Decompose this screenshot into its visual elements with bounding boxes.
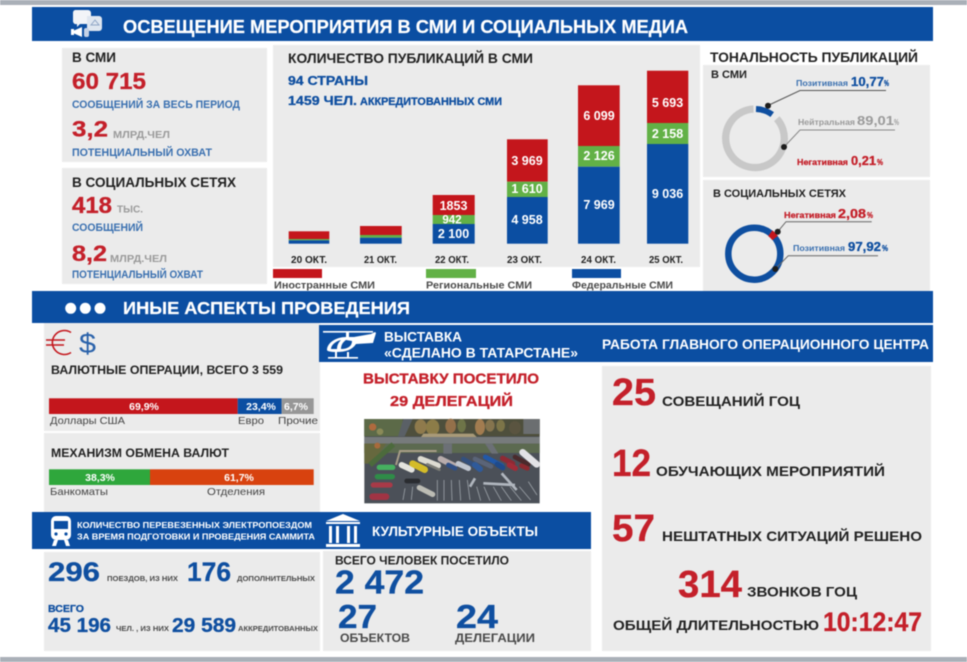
panel: train stats: 29 589 <box>172 615 236 637</box>
bar: currency split: 6,7% <box>284 401 309 413</box>
panel: tonality: В СМИ <box>711 69 747 81</box>
stacked bar chart: 3 969 <box>511 154 543 168</box>
panel: in social networks <box>62 168 267 284</box>
panel: train stats <box>44 552 320 651</box>
stacked bar chart: 2 158 <box>652 127 683 141</box>
panel: cultural stats: 2 472 <box>335 564 424 600</box>
panel: in media: 60 715 <box>72 68 146 94</box>
panel: cultural stats <box>323 551 591 651</box>
stacked bar chart: 6 099 <box>583 109 615 123</box>
panel: in media: СООБЩЕНИЙ ЗА ВЕСЬ ПЕРИОД <box>72 98 240 111</box>
title: ОСВЕЩЕНИЕ МЕРОПРИЯТИЯ В СМИ И СОЦИАЛЬНЫХ МЕДИА <box>123 17 688 37</box>
header band: exhibition and operations centre: РАБОТА ГЛАВНОГО ОПЕРАЦИОННОГО ЦЕНТРА <box>602 336 929 352</box>
panel: tonality: Позитивная <box>796 78 848 88</box>
panel: exchange mechanism: МЕХАНИЗМ ОБМЕНА ВАЛЮТ <box>51 446 230 460</box>
text block: exhibition delegations: ВЫСТАВКУ ПОСЕТИЛО <box>363 372 539 388</box>
panel: cultural stats: ВСЕГО ЧЕЛОВЕК ПОСЕТИЛО <box>335 554 509 568</box>
stacked bar chart: 1853 <box>440 199 467 213</box>
header: other aspects: ИНЫЕ АСПЕКТЫ ПРОВЕДЕНИЯ <box>123 298 410 318</box>
panel: in media <box>62 48 267 162</box>
panel: in media: ПОТЕНЦИАЛЬНЫЙ ОХВАТ <box>72 146 212 159</box>
header: train: КОЛИЧЕСТВО ПЕРЕВЕЗЕННЫХ ЭЛЕКТРОПОЕЗДОМ <box>77 520 312 530</box>
stacked bar chart: 942 <box>442 215 462 227</box>
panel: tonality: 0,21 <box>851 153 876 168</box>
donut: media tonality <box>726 90 895 168</box>
panel: operations centre stats: 12 <box>612 443 651 485</box>
bar: exchange split <box>49 469 314 485</box>
panel: cultural stats: ДЕЛЕГАЦИИ <box>455 631 535 645</box>
chart legend <box>273 269 673 292</box>
panel: operations centre stats: 314 <box>678 564 742 606</box>
panel: cultural stats: 24 <box>456 598 499 635</box>
icon: museum building <box>326 514 360 547</box>
panel: operations centre stats: 25 <box>612 372 656 414</box>
bar: exchange split: 61,7% <box>224 472 255 484</box>
panel: tonality: % <box>884 79 889 88</box>
panel: exchange mechanism: Банкоматы <box>50 486 108 498</box>
panel: in media: В СМИ <box>72 49 116 65</box>
panel: operations centre stats: СОВЕЩАНИЙ ГОЦ <box>662 392 801 409</box>
chart legend: Региональные СМИ <box>426 280 532 292</box>
panel: currency operations: Евро <box>238 415 264 427</box>
panel: tonality: 89,01 <box>857 113 894 128</box>
panel: publications chart: 1459 ЧЕЛ. <box>288 93 357 108</box>
stacked bar chart: 1 610 <box>511 182 543 196</box>
panel: currency operations: ВАЛЮТНЫЕ ОПЕРАЦИИ, ВСЕГО 3 559 <box>51 363 283 377</box>
panel: tonality: ТОНАЛЬНОСТЬ ПУБЛИКАЦИЙ <box>710 48 918 65</box>
panel: train stats: 45 196 <box>48 615 111 637</box>
panel: tonality: 10,77 <box>851 74 884 89</box>
icon: helicopter <box>323 331 376 359</box>
panel: in media: 3,2 <box>72 116 108 142</box>
panel: tonality: % <box>894 118 899 127</box>
header: media coverage <box>32 7 933 41</box>
panel: operations centre stats: ЗВОНКОВ ГОЦ <box>747 584 858 600</box>
stacked bar chart: 2 126 <box>583 149 615 163</box>
icon: euro and dollar <box>46 328 96 359</box>
stacked bar chart: 21 ОКТ. <box>364 255 397 266</box>
header band: exhibition and operations centre <box>319 325 933 362</box>
panel: exchange mechanism: Отделения <box>207 486 265 498</box>
panel: in media: МЛРД.ЧЕЛ <box>113 129 170 141</box>
panel: in social networks: ТЫС. <box>117 204 143 216</box>
panel: currency operations <box>44 323 320 431</box>
panel: tonality: Нейтральная <box>798 117 855 127</box>
stacked bar chart: 23 ОКТ. <box>507 255 542 266</box>
panel: train stats: ПОЕЗДОВ, ИЗ НИХ <box>107 576 178 583</box>
bar: exchange split: 38,3% <box>85 472 116 484</box>
panel: tonality: % <box>867 211 873 220</box>
header: other aspects <box>32 291 933 323</box>
chart legend: Иностранные СМИ <box>274 280 375 292</box>
panel: in social networks: 418 <box>72 192 112 218</box>
panel: tonality: % <box>877 158 883 167</box>
panel: operations centre stats: НЕШТАТНЫХ СИТУАЦИЙ РЕШЕНО <box>662 527 922 544</box>
panel: tonality: % <box>882 244 888 253</box>
text block: exhibition delegations <box>363 372 539 410</box>
panel: tonality: Негативная <box>784 210 836 220</box>
header: train <box>32 512 318 549</box>
panel: in social networks: МЛРД.ЧЕЛ <box>110 253 167 265</box>
panel: operations centre stats: 10:12:47 <box>823 607 922 637</box>
panel: train stats: 176 <box>187 557 231 587</box>
panel: exchange mechanism <box>44 433 320 512</box>
header band: exhibition and operations centre: ВЫСТАВКА <box>384 329 462 345</box>
panel: train stats: ДОПОЛНИТЕЛЬНЫХ <box>237 576 315 583</box>
panel: currency operations: Прочие <box>278 415 318 427</box>
panel: cultural stats: 27 <box>338 598 377 635</box>
panel: publications chart <box>273 45 700 267</box>
stacked bar chart: 4 958 <box>511 213 543 227</box>
header: train: ЗА ВРЕМЯ ПОДГОТОВКИ И ПРОВЕДЕНИЯ САММИТА <box>77 532 315 542</box>
stacked bar chart: 20 ОКТ. <box>291 255 327 266</box>
stacked bar chart: 7 969 <box>583 198 615 212</box>
header: cultural objects <box>318 512 591 549</box>
panel: in social networks: СООБЩЕНИЙ <box>72 221 143 234</box>
header band: exhibition and operations centre: «СДЕЛАНО В ТАТАРСТАНЕ» <box>384 346 578 361</box>
bar: currency split: 69,9% <box>129 401 160 413</box>
panel: train stats: ЧЕЛ. , ИЗ НИХ <box>116 626 169 633</box>
panel: currency operations: Доллары США <box>50 415 125 427</box>
panel: tonality: Негативная <box>797 157 848 167</box>
chart legend: Федеральные СМИ <box>572 280 673 292</box>
stacked bar chart: 9 036 <box>652 187 683 201</box>
header: cultural objects: КУЛЬТУРНЫЕ ОБЪЕКТЫ <box>372 523 538 539</box>
panel: train stats: 296 <box>48 557 100 587</box>
stacked bar chart: 22 ОКТ. <box>435 255 469 266</box>
panel: publications chart: 94 СТРАНЫ <box>288 73 368 88</box>
panel: in social networks: 8,2 <box>72 241 107 266</box>
panel: tonality: В СОЦИАЛЬНЫХ СЕТЯХ <box>713 188 847 200</box>
panel: operations centre stats: ОБУЧАЮЩИХ МЕРОПРИЯТИЙ <box>656 462 885 479</box>
panel: in social networks: ПОТЕНЦИАЛЬНЫЙ ОХВАТ <box>72 268 203 281</box>
panel: operations centre stats <box>602 366 931 651</box>
stacked bar chart: 25 ОКТ. <box>649 255 683 266</box>
icon: train <box>51 516 71 546</box>
bar: currency split <box>49 398 314 414</box>
panel: tonality <box>703 48 930 291</box>
panel: train stats: ВСЕГО <box>48 603 84 615</box>
icon: euro and dollar: $ <box>79 328 96 359</box>
chart heading: КОЛИЧЕСТВО ПУБЛИКАЦИЙ В СМИ <box>288 49 533 66</box>
donut: social tonality <box>728 222 878 280</box>
bar: currency split: 23,4% <box>246 401 277 413</box>
panel: cultural stats: ОБЪЕКТОВ <box>340 631 410 645</box>
panel: operations centre stats: ОБЩЕЙ ДЛИТЕЛЬНОСТЬЮ <box>613 616 819 633</box>
panel: operations centre stats: 57 <box>612 508 655 550</box>
panel: publications chart: АККРЕДИТОВАННЫХ СМИ <box>360 96 502 108</box>
panel: tonality: 2,08 <box>838 206 866 221</box>
text block: exhibition delegations: 29 ДЕЛЕГАЦИЙ <box>390 392 513 410</box>
stacked bar chart <box>289 71 688 266</box>
icon: social media chat bubbles <box>71 10 102 37</box>
panel: tonality: 97,92 <box>848 239 881 254</box>
stacked bar chart: 2 100 <box>438 227 469 241</box>
panel: tonality: Позитивная <box>793 243 845 253</box>
panel: train stats: АККРЕДИТОВАННЫХ <box>238 626 318 633</box>
stacked bar chart: 5 693 <box>652 96 683 110</box>
stacked bar chart: 24 ОКТ. <box>581 255 616 266</box>
panel: in social networks: В СОЦИАЛЬНЫХ СЕТЯХ <box>72 174 237 190</box>
photo: exhibition vehicles <box>364 419 540 503</box>
